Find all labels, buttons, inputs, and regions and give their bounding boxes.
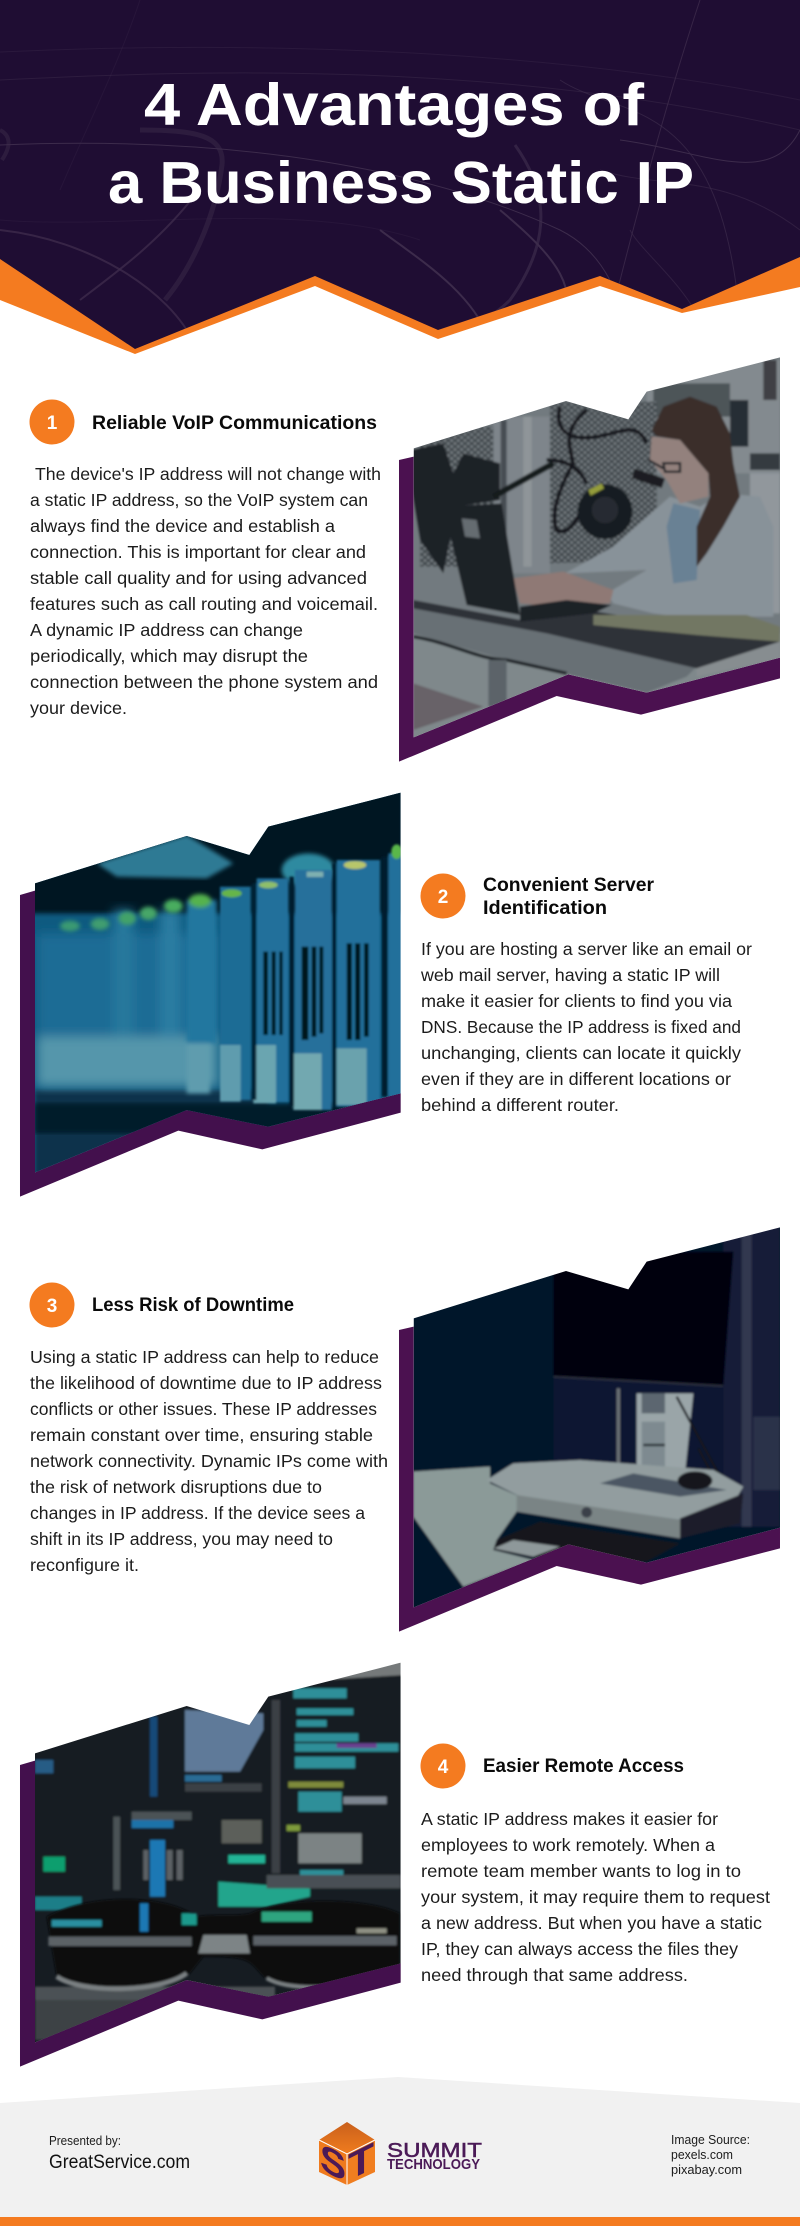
body text 2: If you are hosting a server like an email or bbox=[421, 939, 752, 959]
body text 3: Using a static IP address can help to reduce bbox=[30, 1347, 379, 1367]
photo panel: server rack bbox=[20, 790, 403, 1197]
body text 3: shift in its IP address, you may need to bbox=[30, 1529, 333, 1549]
logo: Summit Technology: SUMMIT bbox=[387, 2139, 483, 2162]
body text 1: periodically, which may disrupt the bbox=[30, 646, 308, 666]
body text 2: web mail server, having a static IP will bbox=[420, 965, 720, 985]
body text 3: network connectivity. Dynamic IPs come with bbox=[30, 1451, 388, 1471]
body text 3 bbox=[30, 1347, 388, 1575]
title: 4 Advantages of bbox=[144, 72, 644, 138]
body text 2: make it easier for clients to find you via bbox=[421, 991, 732, 1011]
body text 4: IP, they can always access the files they bbox=[421, 1939, 738, 1959]
photo panel: monitor and desk bbox=[399, 1223, 783, 1632]
body text 3: reconfigure it. bbox=[30, 1555, 139, 1575]
panel: section 1 text bbox=[30, 400, 381, 718]
heading 1: Reliable VoIP Communications bbox=[92, 412, 377, 434]
heading 2 bbox=[483, 874, 654, 919]
body text 1 bbox=[30, 464, 381, 718]
number badge 2: 2 bbox=[438, 887, 448, 908]
footer background bbox=[0, 2077, 800, 2226]
heading 4: Easier Remote Access bbox=[483, 1755, 684, 1777]
number badge 3: 3 bbox=[47, 1296, 57, 1317]
logo: Summit Technology: TECHNOLOGY bbox=[387, 2156, 480, 2173]
body text 3: the risk of network disruptions due to bbox=[30, 1477, 322, 1497]
body text 4: A static IP address makes it easier for bbox=[421, 1809, 718, 1829]
image source: pixabay.com bbox=[671, 2162, 742, 2177]
image source bbox=[671, 2132, 750, 2177]
number badge 3 bbox=[30, 1282, 74, 1328]
body text 1: A dynamic IP address can change bbox=[30, 620, 303, 640]
body text 2: behind a different router. bbox=[421, 1095, 619, 1115]
body text 2: DNS. Because the IP address is fixed and bbox=[421, 1017, 741, 1037]
body text 4 bbox=[421, 1809, 770, 1985]
photo panel: code on screens through glasses bbox=[20, 1660, 403, 2067]
body text 1: The device's IP address will not change with bbox=[35, 464, 381, 484]
panel: section 2 text bbox=[420, 874, 752, 1115]
heading 3: Less Risk of Downtime bbox=[92, 1294, 294, 1316]
presented by: GreatService.com bbox=[49, 2152, 190, 2173]
body text 1: a static IP address, so the VoIP system can bbox=[30, 490, 368, 510]
orange zigzag band bbox=[0, 250, 800, 354]
title bbox=[108, 72, 694, 216]
header banner bbox=[0, 0, 800, 354]
logo: Summit Technology bbox=[319, 2122, 483, 2190]
body text 4: your system, it may require them to request bbox=[421, 1887, 770, 1907]
body text 1: your device. bbox=[30, 698, 127, 718]
photo panel: woman at laptop bbox=[399, 353, 783, 762]
body text 4: need through that same address. bbox=[421, 1965, 688, 1985]
presented by bbox=[49, 2133, 190, 2173]
body text 2 bbox=[420, 939, 752, 1115]
number badge 2 bbox=[420, 874, 466, 918]
footer bbox=[0, 2077, 800, 2226]
body text 1: stable call quality and for using advanced bbox=[30, 568, 367, 588]
body text 4: remote team member wants to log in to bbox=[421, 1861, 741, 1881]
body text 1: connection. This is important for clear and bbox=[30, 542, 366, 562]
number badge 4 bbox=[420, 1744, 466, 1788]
body text 3: the likelihood of downtime due to IP address bbox=[30, 1373, 382, 1393]
body text 1: features such as call routing and voicemail. bbox=[30, 594, 378, 614]
presented by: Presented by: bbox=[49, 2133, 121, 2148]
title: a Business Static IP bbox=[108, 150, 694, 216]
body text 3: conflicts or other issues. These IP addresses bbox=[30, 1399, 377, 1419]
number badge 1: 1 bbox=[47, 413, 58, 434]
heading 2: Identification bbox=[483, 897, 607, 919]
body text 4: a new address. But when you have a static bbox=[421, 1913, 762, 1933]
image source: Image Source: bbox=[671, 2132, 750, 2147]
number badge 1 bbox=[30, 400, 74, 444]
body text 1: connection between the phone system and bbox=[30, 672, 378, 692]
body text 1: always find the device and establish a bbox=[30, 516, 335, 536]
body text 4: employees to work remotely. When a bbox=[421, 1835, 715, 1855]
body text 2: even if they are in different locations or bbox=[421, 1069, 731, 1089]
orange footer bar bbox=[0, 2217, 800, 2226]
dark purple header background bbox=[0, 0, 800, 349]
body text 3: changes in IP address. If the device sees a bbox=[30, 1503, 365, 1523]
number badge 4: 4 bbox=[438, 1757, 449, 1778]
logo: Summit Technology: T bbox=[348, 2134, 374, 2189]
body text 3: remain constant over time, ensuring stable bbox=[30, 1425, 373, 1445]
panel: section 4 text bbox=[420, 1744, 770, 1985]
heading 2: Convenient Server bbox=[483, 874, 654, 896]
logo: Summit Technology: S bbox=[320, 2135, 346, 2190]
image source: pexels.com bbox=[671, 2147, 733, 2162]
body text 2: unchanging, clients can locate it quickly bbox=[421, 1043, 741, 1063]
panel: section 3 text bbox=[30, 1282, 388, 1575]
